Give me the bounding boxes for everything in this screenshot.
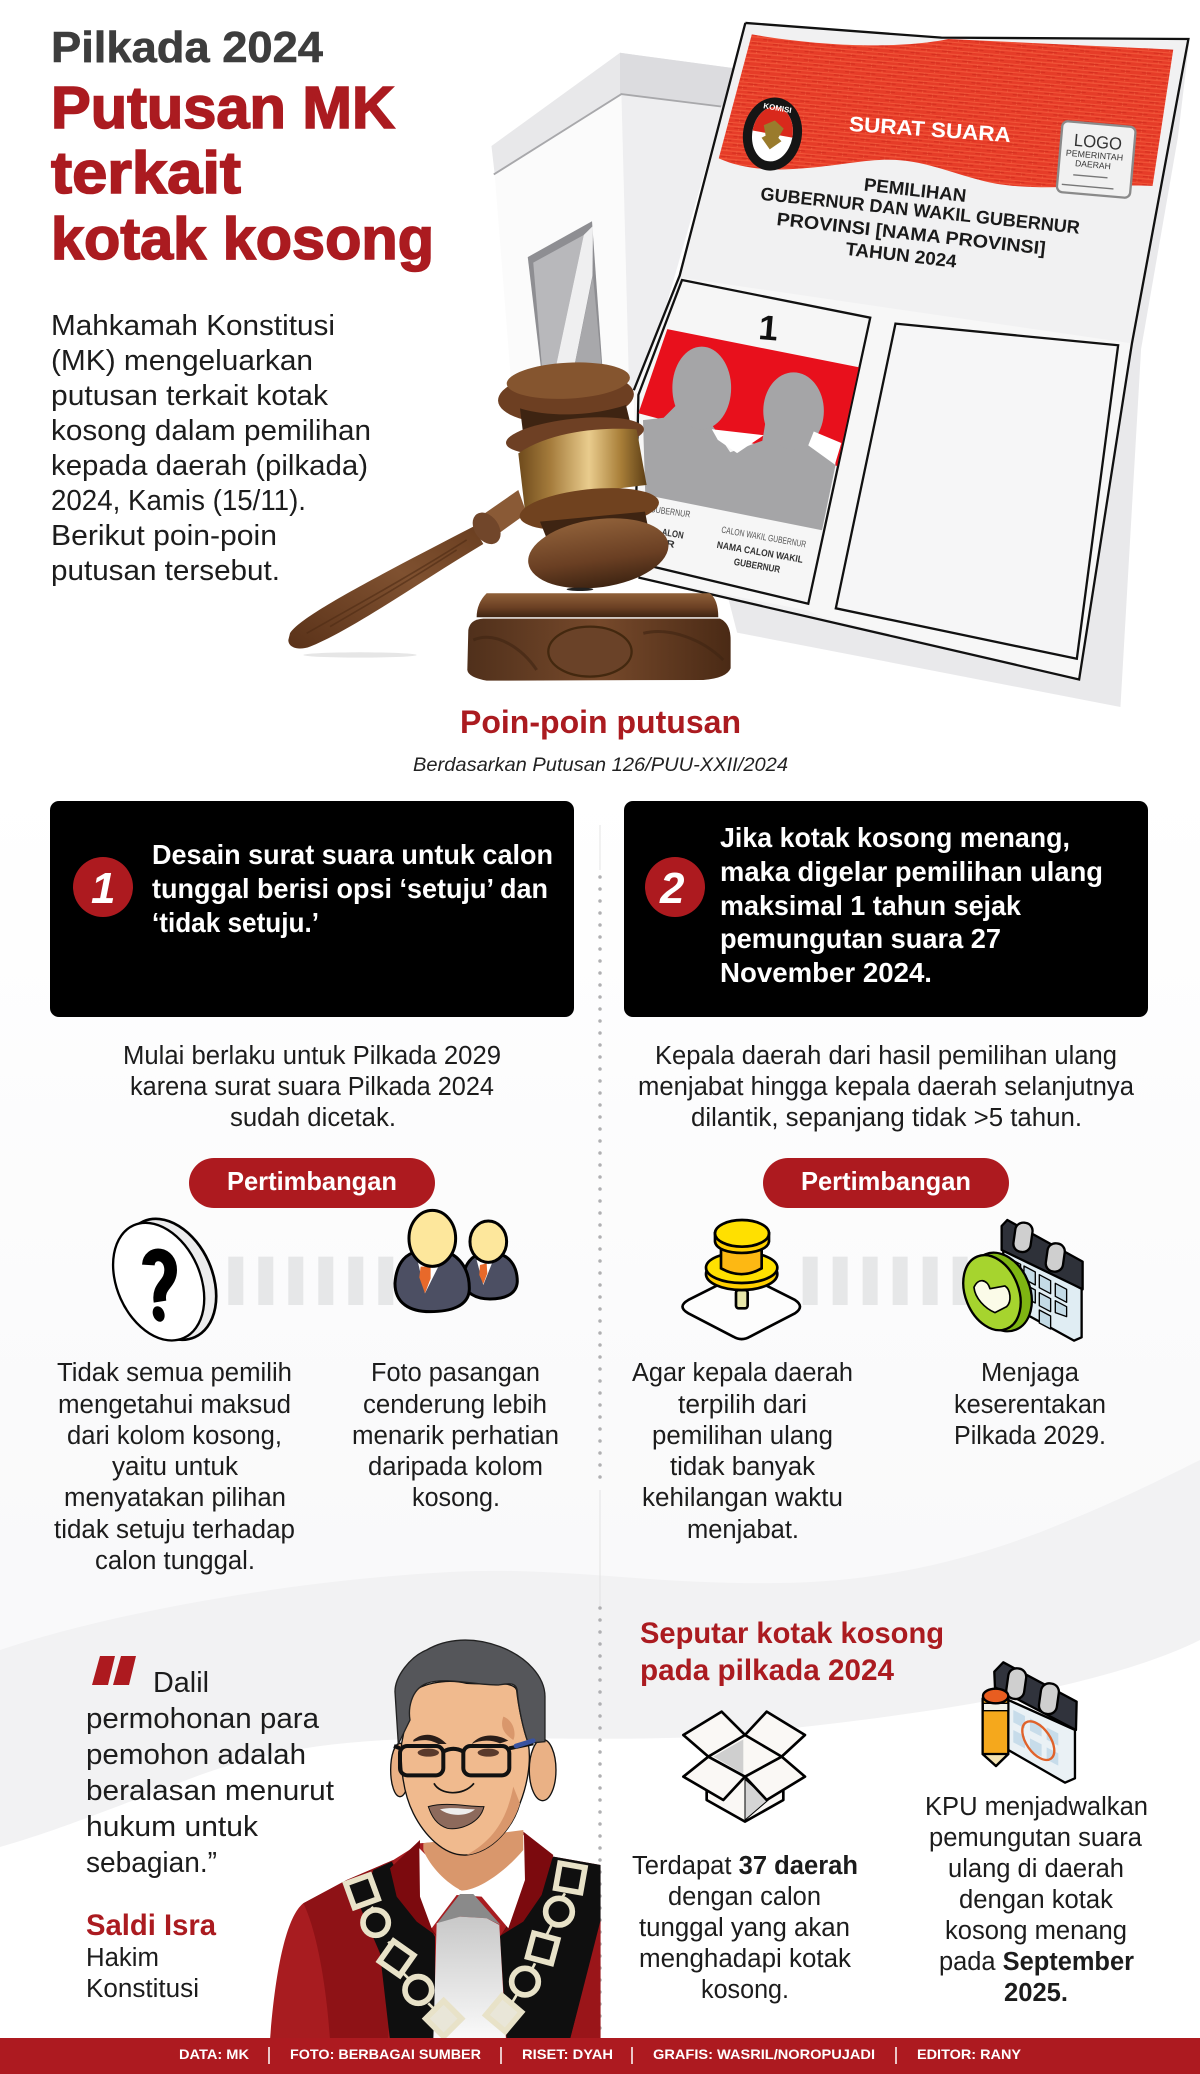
KPU logo: KOMISI xyxy=(763,101,792,115)
text: September 2025: 2025. xyxy=(1004,1979,1068,2007)
title: Putusan MK xyxy=(51,75,395,141)
text: reason 1: mengetahui maksud xyxy=(58,1391,291,1419)
text: reason 1: dari kolom kosong, xyxy=(67,1422,282,1450)
text: point 1 detail: sudah dicetak. xyxy=(230,1104,396,1132)
pill: pertimbangan left xyxy=(189,1158,435,1208)
heading: seputar kotak kosong xyxy=(640,1617,944,1687)
text: reason 1: calon tunggal. xyxy=(95,1547,255,1575)
candidate panel: R xyxy=(665,538,676,551)
candidate panel: GUBERNUR xyxy=(650,504,691,520)
candidate panel: NAMA CALON WAKIL xyxy=(716,540,804,566)
intro paragraph: Mahkamah Konstitusi xyxy=(51,310,335,342)
surat suara label: SURAT SUARA xyxy=(848,113,1012,147)
quote: Dalil xyxy=(153,1667,209,1699)
footer credits: FOTO: BERBAGAI SUMBER xyxy=(290,2046,481,2062)
quote: pemohon adalah xyxy=(86,1739,306,1771)
quote: sebagian.” xyxy=(86,1847,217,1879)
speaker name: Hakim xyxy=(86,1944,159,1972)
text: point 2 detail: menjabat hingga kepala daerah selanjutnya xyxy=(638,1073,1135,1101)
hero illustration: ballot box and ballot paper xyxy=(491,23,1189,707)
text: reason 4: keserentakan xyxy=(954,1391,1106,1419)
text: September 2025: dengan kotak xyxy=(959,1886,1113,1914)
government logo placeholder: DAERAH xyxy=(1075,158,1111,171)
red header band xyxy=(719,34,1173,187)
text: September 2025 xyxy=(925,1793,1148,2007)
portrait: Saldi Isra xyxy=(270,1640,601,2040)
icon: calendar with check xyxy=(953,1220,1083,1341)
text: reason 2: Foto pasangan xyxy=(371,1359,540,1387)
text: reason 3: menjabat. xyxy=(687,1516,799,1544)
text: reason 3: Agar kepala daerah xyxy=(632,1359,853,1387)
candidate panel: ALON xyxy=(661,527,684,542)
text: point 1 detail: karena surat suara Pilkada 2024 xyxy=(130,1073,494,1101)
ballot heading xyxy=(760,174,1081,272)
heading: seputar kotak kosong: Seputar kotak kosong xyxy=(640,1617,944,1650)
intro paragraph: kepada daerah (pilkada) xyxy=(51,450,368,482)
intro paragraph: (MK) mengeluarkan xyxy=(51,345,313,377)
face shading xyxy=(467,1717,520,1855)
glasses xyxy=(394,1743,533,1775)
panel: point 2: Jika kotak kosong menang, xyxy=(720,822,1070,853)
footer credits: GRAFIS: WASRIL/NOROPUJADI xyxy=(653,2046,875,2062)
icon: quotation mark xyxy=(92,1656,136,1685)
footer credits: EDITOR: RANY xyxy=(917,2046,1022,2062)
text: reason 2 xyxy=(352,1359,559,1512)
text: reason 1: menyatakan pilihan xyxy=(64,1484,286,1512)
text: 37 daerah: menghadapi kotak xyxy=(639,1945,851,1973)
text: point 2 detail: Kepala daerah dari hasil pemilihan ulang xyxy=(655,1042,1117,1070)
icon: two officials xyxy=(395,1210,517,1312)
pill: pertimbangan right: Pertimbangan xyxy=(801,1166,971,1196)
quote: hukum untuk xyxy=(86,1811,259,1843)
icon: calendar with pencil xyxy=(983,1662,1077,1783)
pill: pertimbangan left: Pertimbangan xyxy=(227,1166,397,1196)
intro paragraph: Berikut poin-poin xyxy=(51,520,277,552)
text: 37 daerah: Terdapat 37 daerah xyxy=(632,1852,858,1880)
title: Pilkada 2024 xyxy=(51,23,324,72)
government logo placeholder: LOGO xyxy=(1073,130,1123,154)
candidate panel xyxy=(636,280,870,604)
panel: point 2 xyxy=(624,801,1148,1017)
pill: pertimbangan right xyxy=(763,1158,1009,1208)
footer credits xyxy=(0,2038,1200,2074)
government logo placeholder: PEMERINTAH xyxy=(1065,148,1124,163)
text: point 2 detail xyxy=(638,1042,1135,1132)
text: reason 1: Tidak semua pemilih xyxy=(57,1359,292,1387)
heading: poin-poin putusan: Poin-poin putusan xyxy=(460,704,741,740)
icon: question disc xyxy=(96,1204,234,1355)
quote xyxy=(86,1656,334,1879)
text: reason 3: kehilangan waktu xyxy=(642,1484,843,1512)
tie and jabot xyxy=(437,1894,501,1925)
stripes xyxy=(228,1257,393,1305)
text: September 2025: kosong menang xyxy=(945,1917,1127,1945)
text: reason 2: cenderung lebih xyxy=(363,1391,547,1419)
text: reason 3: terpilih dari xyxy=(678,1391,807,1419)
brows, eyes, nose and mouth xyxy=(413,1735,508,1744)
column divider xyxy=(599,825,601,2036)
panel: point 1 xyxy=(50,801,574,1017)
text: reason 1 xyxy=(54,1359,295,1575)
panel: point 1: ‘tidak setuju.’ xyxy=(152,907,319,938)
KPU logo xyxy=(737,93,808,175)
blank panel xyxy=(836,324,1118,659)
icon: number 2 xyxy=(645,857,705,917)
quote: permohonan para xyxy=(86,1703,320,1735)
ballot heading: PEMILIHAN xyxy=(863,174,967,206)
icon row right: pin, stripes, calendar xyxy=(682,1220,1083,1341)
hair xyxy=(395,1640,545,1744)
text: point 1 detail xyxy=(123,1042,501,1132)
footer credits: RISET: DYAH xyxy=(522,2046,613,2062)
head xyxy=(391,1681,556,1855)
footer credits: DATA: MK xyxy=(179,2046,249,2062)
ballot heading: PROVINSI [NAMA PROVINSI] xyxy=(776,208,1047,259)
speaker name: Saldi Isra xyxy=(86,1909,216,1942)
speaker name xyxy=(86,1909,216,2003)
candidate panel: 1 xyxy=(757,308,780,348)
text: reason 1: tidak setuju terhadap xyxy=(54,1516,295,1544)
title: terkait xyxy=(51,140,241,206)
text: September 2025: KPU menjadwalkan xyxy=(925,1793,1148,1821)
intro paragraph: putusan tersebut. xyxy=(51,555,280,587)
candidate panel: CALON WAKIL GUBERNUR xyxy=(721,525,807,549)
icon: open box xyxy=(683,1712,805,1822)
ballot paper xyxy=(634,23,1189,707)
panel: point 2: maksimal 1 tahun sejak xyxy=(720,890,1021,921)
stripes xyxy=(803,1257,968,1305)
robe xyxy=(270,1837,601,2040)
text: reason 3: pemilihan ulang xyxy=(652,1422,833,1450)
panel: point 2: maka digelar pemilihan ulang xyxy=(720,856,1103,887)
heading: poin-poin putusan: Berdasarkan Putusan 126/PUU-XXII/2024 xyxy=(413,755,788,776)
panel: point 1: Desain surat suara untuk calon xyxy=(152,839,553,870)
intro paragraph: 2024, Kamis (15/11). xyxy=(51,485,306,517)
quote: beralasan menurut xyxy=(86,1775,334,1807)
intro paragraph: putusan terkait kotak xyxy=(51,380,329,412)
ballot box xyxy=(491,53,733,395)
panel: point 2: pemungutan suara 27 xyxy=(720,923,1001,954)
title: kotak kosong xyxy=(51,206,434,272)
text: reason 2: kosong. xyxy=(412,1484,500,1512)
intro paragraph: kosong dalam pemilihan xyxy=(51,415,371,447)
text: reason 4: Menjaga xyxy=(981,1359,1080,1387)
text: reason 2: daripada kolom xyxy=(368,1453,543,1481)
ballot heading: GUBERNUR DAN WAKIL GUBERNUR xyxy=(760,183,1081,238)
text: point 2 detail: dilantik, sepanjang tidak >5 tahun. xyxy=(691,1104,1082,1132)
text: September 2025: pemungutan suara xyxy=(929,1824,1143,1852)
candidate panel: GUBERNUR xyxy=(733,557,781,576)
intro paragraph xyxy=(51,310,371,587)
text: reason 4: Pilkada 2029. xyxy=(954,1422,1106,1450)
text: 37 daerah: tunggal yang akan xyxy=(639,1914,850,1942)
text: September 2025: pada September xyxy=(939,1948,1134,1976)
text: point 1 detail: Mulai berlaku untuk Pilkada 2029 xyxy=(123,1042,501,1070)
text: reason 3 xyxy=(632,1359,853,1544)
text: 37 daerah: kosong. xyxy=(701,1976,789,2004)
icon: push pin xyxy=(682,1220,800,1339)
text: 37 daerah xyxy=(632,1852,858,2004)
text: reason 1: yaitu untuk xyxy=(112,1453,238,1481)
text: reason 3: tidak banyak xyxy=(670,1453,815,1481)
title xyxy=(51,23,434,272)
heading: poin-poin putusan xyxy=(413,704,788,776)
heading: seputar kotak kosong: pada pilkada 2024 xyxy=(640,1654,894,1687)
icon: number 1 xyxy=(73,857,133,917)
text: September 2025: ulang di daerah xyxy=(948,1855,1124,1883)
icon row left: question disc, stripes, people xyxy=(96,1204,517,1355)
icon: number 2: 2 xyxy=(659,864,685,913)
icon: gavel xyxy=(288,359,731,681)
text: reason 4 xyxy=(954,1359,1106,1450)
speaker name: Konstitusi xyxy=(86,1975,199,2003)
ballot heading: TAHUN 2024 xyxy=(845,238,959,272)
panel: point 2: November 2024. xyxy=(720,957,932,988)
text: reason 2: menarik perhatian xyxy=(352,1422,559,1450)
panel: point 1: tunggal berisi opsi ‘setuju’ dan xyxy=(152,873,548,904)
text: 37 daerah: dengan calon xyxy=(668,1883,821,1911)
icon: number 1: 1 xyxy=(91,864,115,913)
chain of office xyxy=(346,1863,585,2037)
government logo placeholder xyxy=(1057,121,1136,198)
